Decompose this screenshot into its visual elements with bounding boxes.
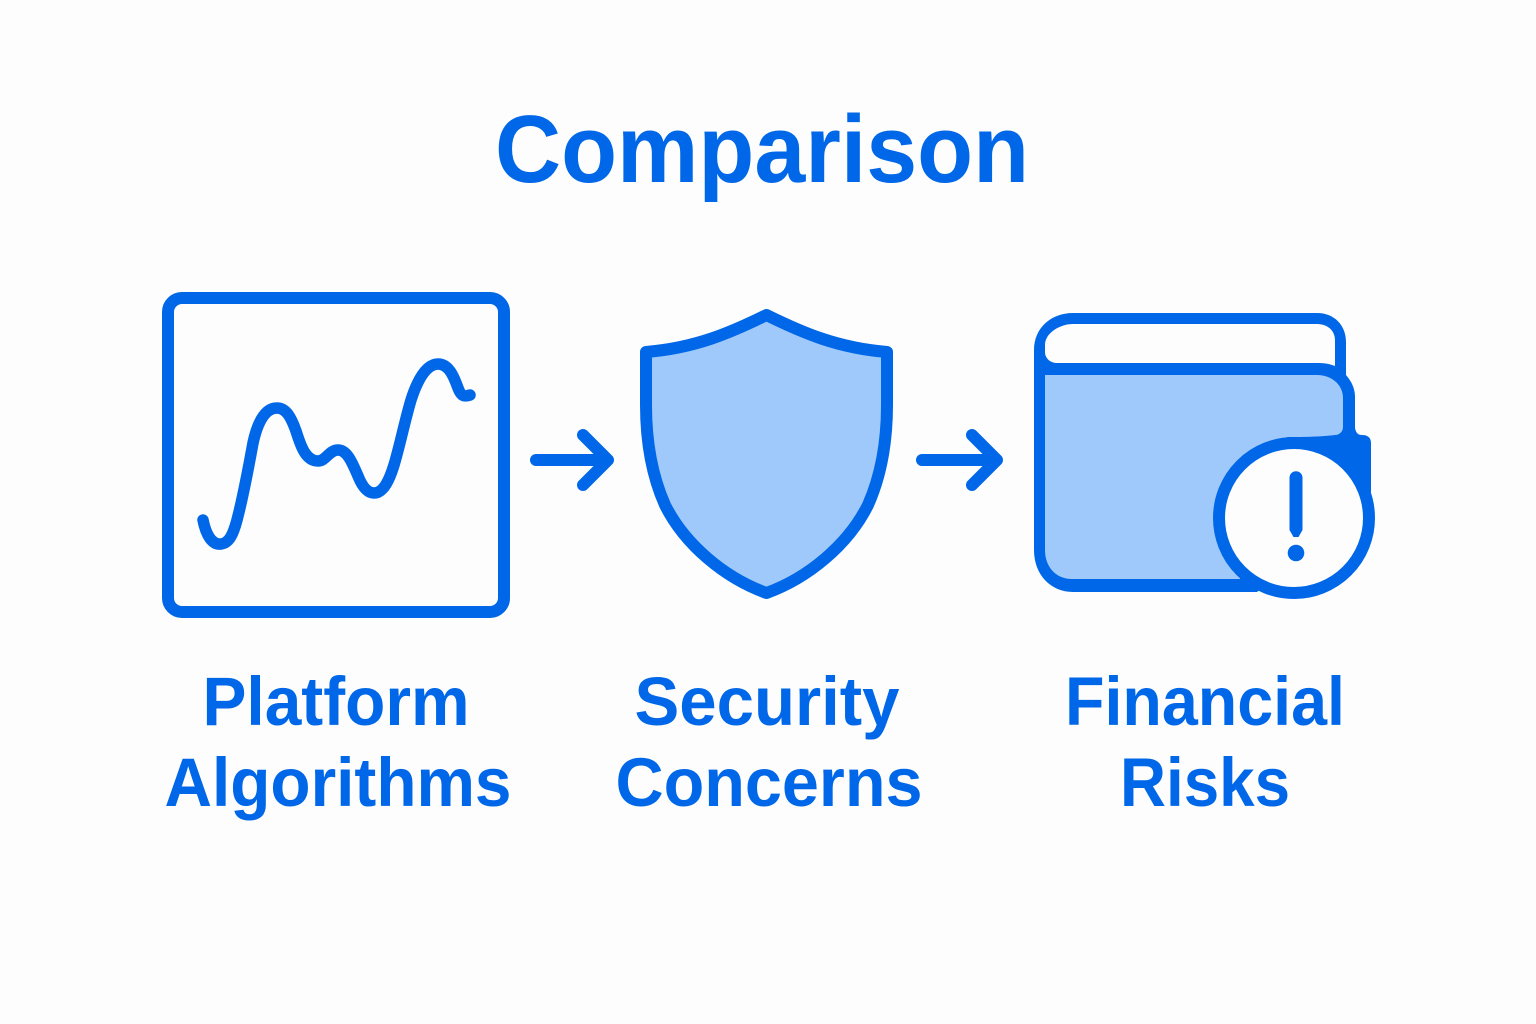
icon: shield [646,315,887,593]
label: security concerns: Security [634,663,900,740]
icon: line chart in square frame [168,298,504,612]
arrow: algorithms to security [536,435,608,485]
warning badge [1219,443,1369,593]
exclamation mark dot [1288,545,1304,561]
wallet silhouette [1034,313,1371,592]
label: financial risks [1065,663,1345,821]
icon: wallet with warning badge [1034,313,1371,593]
label: financial risks: Risks [1120,744,1290,821]
label: platform algorithms: Algorithms [164,744,512,821]
exclamation mark bar [1290,471,1302,537]
label: financial risks: Financial [1065,663,1345,740]
label: security concerns: Concerns [616,744,922,821]
wallet body fill [1045,375,1343,579]
arrow: security to financial [922,435,997,485]
title: Comparison [495,96,1029,203]
label: platform algorithms [164,663,512,821]
wallet flap opening [1045,324,1335,366]
label: security concerns [616,663,922,821]
label: platform algorithms: Platform [202,663,470,740]
